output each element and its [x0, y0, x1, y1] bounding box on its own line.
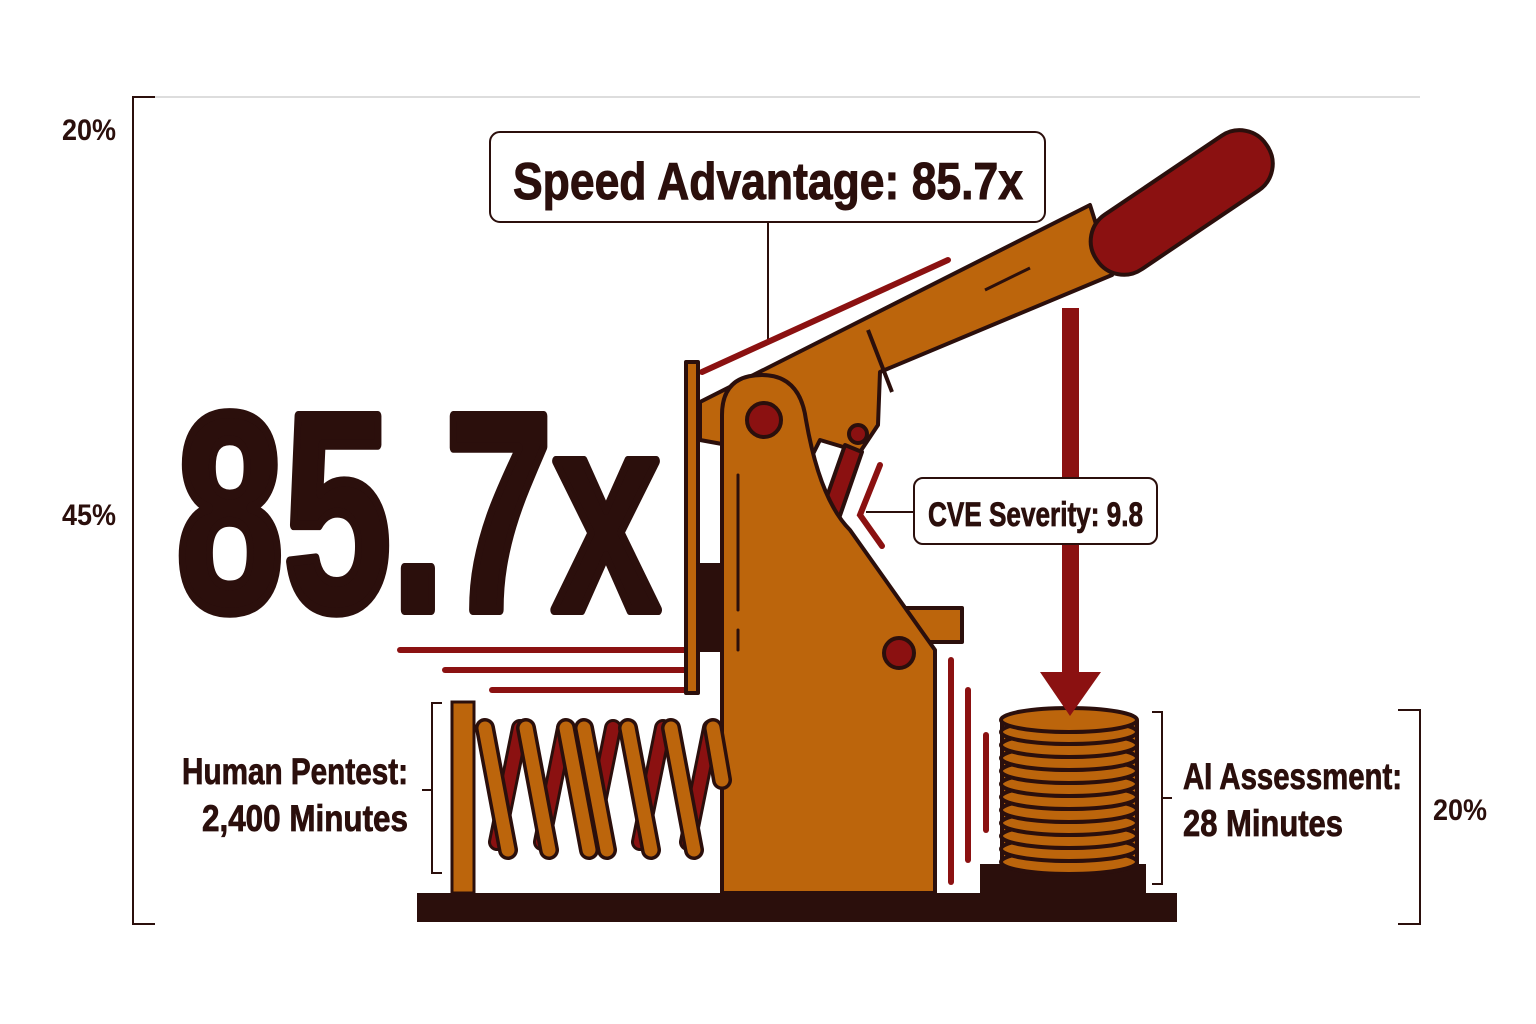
human pentest label [182, 751, 408, 839]
frame [133, 97, 1420, 924]
label: 45%: 45% [62, 499, 116, 532]
arm [700, 205, 1112, 460]
red link [818, 445, 862, 530]
CVE callout [866, 478, 1157, 544]
CVE callout: CVE Severity: 9.8 [928, 496, 1143, 534]
human pentest label: Human Pentest: [182, 751, 408, 792]
coil stack [982, 708, 1144, 894]
chevron [860, 465, 882, 546]
arrow down [1040, 308, 1101, 716]
AI assessment label: 28 Minutes [1183, 803, 1343, 844]
plate [686, 362, 698, 693]
label: 20% right: 20% [1433, 794, 1487, 827]
speed lines [400, 260, 986, 882]
base [417, 893, 1177, 922]
label: 20% top: 20% [62, 114, 116, 147]
human pentest label: 2,400 Minutes [202, 798, 408, 839]
shelf [905, 608, 962, 642]
body [722, 375, 935, 893]
grip [1078, 118, 1285, 287]
AI assessment label: AI Assessment: [1183, 756, 1402, 797]
AI assessment label [1183, 756, 1402, 844]
title callout [490, 132, 1045, 342]
big number: 85.7x [176, 355, 661, 670]
lever mechanism [686, 118, 1285, 893]
brackets [422, 703, 1172, 884]
spring [452, 702, 722, 893]
title callout: Speed Advantage: 85.7x [513, 153, 1023, 211]
